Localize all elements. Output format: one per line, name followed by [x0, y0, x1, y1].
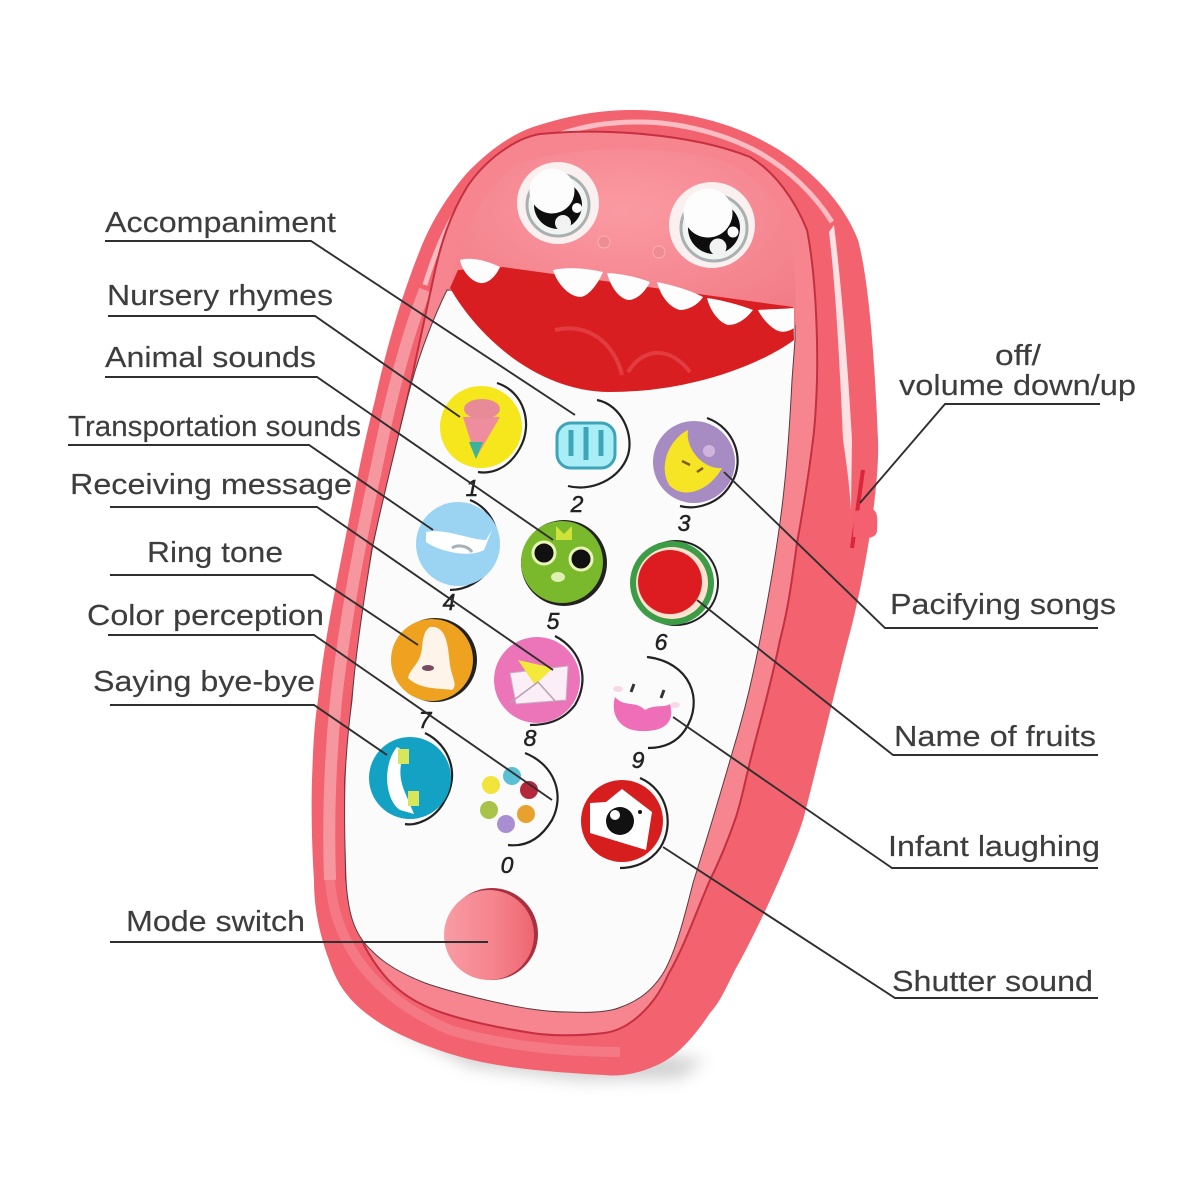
label: Name of fruits: Name of fruits: [894, 721, 1096, 753]
key numbers: [419, 475, 691, 878]
button call: telephone: [369, 733, 452, 824]
key numbers: 8: [524, 725, 537, 751]
button 7: bell: [391, 618, 477, 702]
button camera: [581, 778, 668, 868]
pale lower band: [330, 880, 620, 1052]
label: Ring tone: Ring tone: [147, 537, 283, 569]
screen: [345, 290, 795, 1012]
label: off / volume down/up: volume down/up: [899, 370, 1136, 402]
key numbers: 1: [466, 475, 478, 501]
mode button: [444, 888, 538, 980]
key numbers: 5: [547, 608, 560, 634]
label: Saying bye-bye: Saying bye-bye: [93, 666, 315, 698]
label: Pacifying songs: Pacifying songs: [890, 589, 1116, 621]
face panel: [450, 149, 796, 325]
leader lines: [68, 241, 1100, 998]
phone toy: [312, 110, 878, 1080]
label: Receiving message: Receiving message: [70, 469, 352, 501]
phone body: [312, 110, 878, 1076]
nostrils: [598, 236, 665, 258]
side power switch: [852, 470, 877, 548]
ground shadow: [385, 1022, 705, 1080]
button 0: colour dots: [480, 753, 558, 845]
label: Nursery rhymes: Nursery rhymes: [107, 280, 333, 312]
label: Color perception: Color perception: [87, 600, 324, 632]
key numbers: 6: [655, 629, 668, 655]
pale left band: [329, 290, 425, 880]
right body highlight strip: [829, 225, 852, 510]
eye right: [669, 182, 755, 268]
key numbers: 9: [632, 747, 645, 773]
button 2: piano: [557, 400, 630, 488]
label: off / volume down/up: off/: [995, 340, 1042, 372]
button 1: microphone: [440, 383, 526, 472]
button 4: airplane: [416, 500, 500, 590]
button 8: envelope: [494, 636, 582, 725]
eye left: [517, 162, 599, 244]
button 3: moon: [653, 418, 738, 507]
label: Infant laughing: Infant laughing: [888, 831, 1100, 863]
key numbers: 2: [570, 491, 584, 517]
inner frame with groove line: [345, 132, 817, 1035]
label: Mode switch: Mode switch: [126, 906, 305, 938]
label: Transportation sounds: Transportation sounds: [68, 411, 361, 443]
pale rim highlight: [425, 122, 832, 285]
key numbers: 7: [419, 707, 433, 733]
label: Accompaniment: Accompaniment: [105, 207, 336, 239]
key numbers: 3: [678, 510, 691, 536]
label: off / volume down/up: [899, 340, 1136, 402]
label: Shutter sound: Shutter sound: [892, 966, 1093, 998]
key numbers: 4: [443, 589, 455, 615]
button 9: smiling face: [613, 657, 694, 748]
button 5: frog: [521, 520, 607, 606]
teeth: [460, 259, 794, 332]
key numbers: 0: [501, 852, 514, 878]
mouth: [450, 259, 794, 392]
label: Animal sounds: Animal sounds: [105, 342, 316, 374]
button 6: watermelon: [630, 541, 718, 625]
